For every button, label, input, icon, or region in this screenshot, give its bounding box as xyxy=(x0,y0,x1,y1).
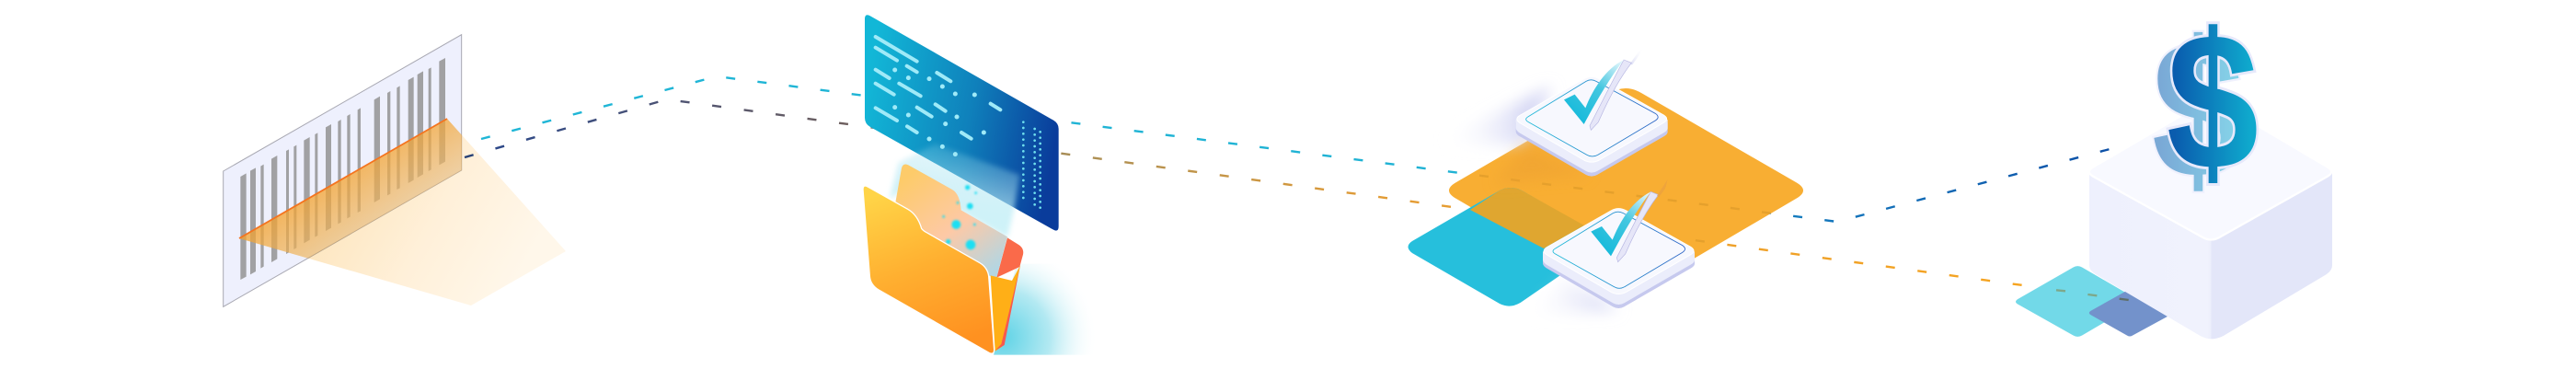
light beam from folder to card xyxy=(890,144,1019,237)
barcode bars xyxy=(240,58,445,280)
stage 2: data card and folder xyxy=(863,15,1101,355)
dollar sign: $ xyxy=(2152,0,2244,218)
dashed connector: navy to orange xyxy=(465,99,2123,299)
tile shadow lower xyxy=(1524,279,1619,316)
upper check tile xyxy=(1516,48,1668,177)
lower check mark xyxy=(1591,179,1668,262)
folder back tab xyxy=(996,237,1023,278)
data card xyxy=(865,15,1059,231)
lower check tile xyxy=(1543,179,1695,308)
blue floor tile xyxy=(2089,290,2169,336)
stage 1: barcode scanner xyxy=(224,35,462,306)
barcode label xyxy=(224,35,462,306)
cube xyxy=(2089,100,2332,339)
scan line xyxy=(239,119,447,238)
data particles xyxy=(942,185,977,249)
card dot columns xyxy=(1023,122,1041,209)
cyan floor tile xyxy=(2016,266,2141,337)
upper check mark xyxy=(1564,48,1643,130)
scanner light cone xyxy=(239,119,566,306)
stage 3: verified checks on tiles xyxy=(1408,88,1803,306)
glow behind folder xyxy=(994,264,1101,355)
stage 4: payment block xyxy=(2016,0,2332,339)
scanner cone on the label xyxy=(240,119,462,258)
card text lines xyxy=(876,37,1000,155)
tile shadow on platform xyxy=(1493,144,1592,184)
folder red edge xyxy=(995,265,1020,351)
orange platform xyxy=(1449,88,1803,293)
dashes on floor tiles xyxy=(2056,290,2129,300)
dashed connector: teal to blue xyxy=(481,76,2113,222)
lower tile frame xyxy=(1553,212,1685,288)
tile shadow upper xyxy=(1432,86,1552,144)
cyan platform xyxy=(1408,188,1610,306)
folder sheet xyxy=(895,165,1007,278)
folder front xyxy=(863,186,995,353)
folder inner side xyxy=(991,265,1020,352)
upper tile frame xyxy=(1526,80,1658,156)
platform overlap xyxy=(1470,188,1584,248)
connector dashes over platform xyxy=(1479,175,1771,243)
